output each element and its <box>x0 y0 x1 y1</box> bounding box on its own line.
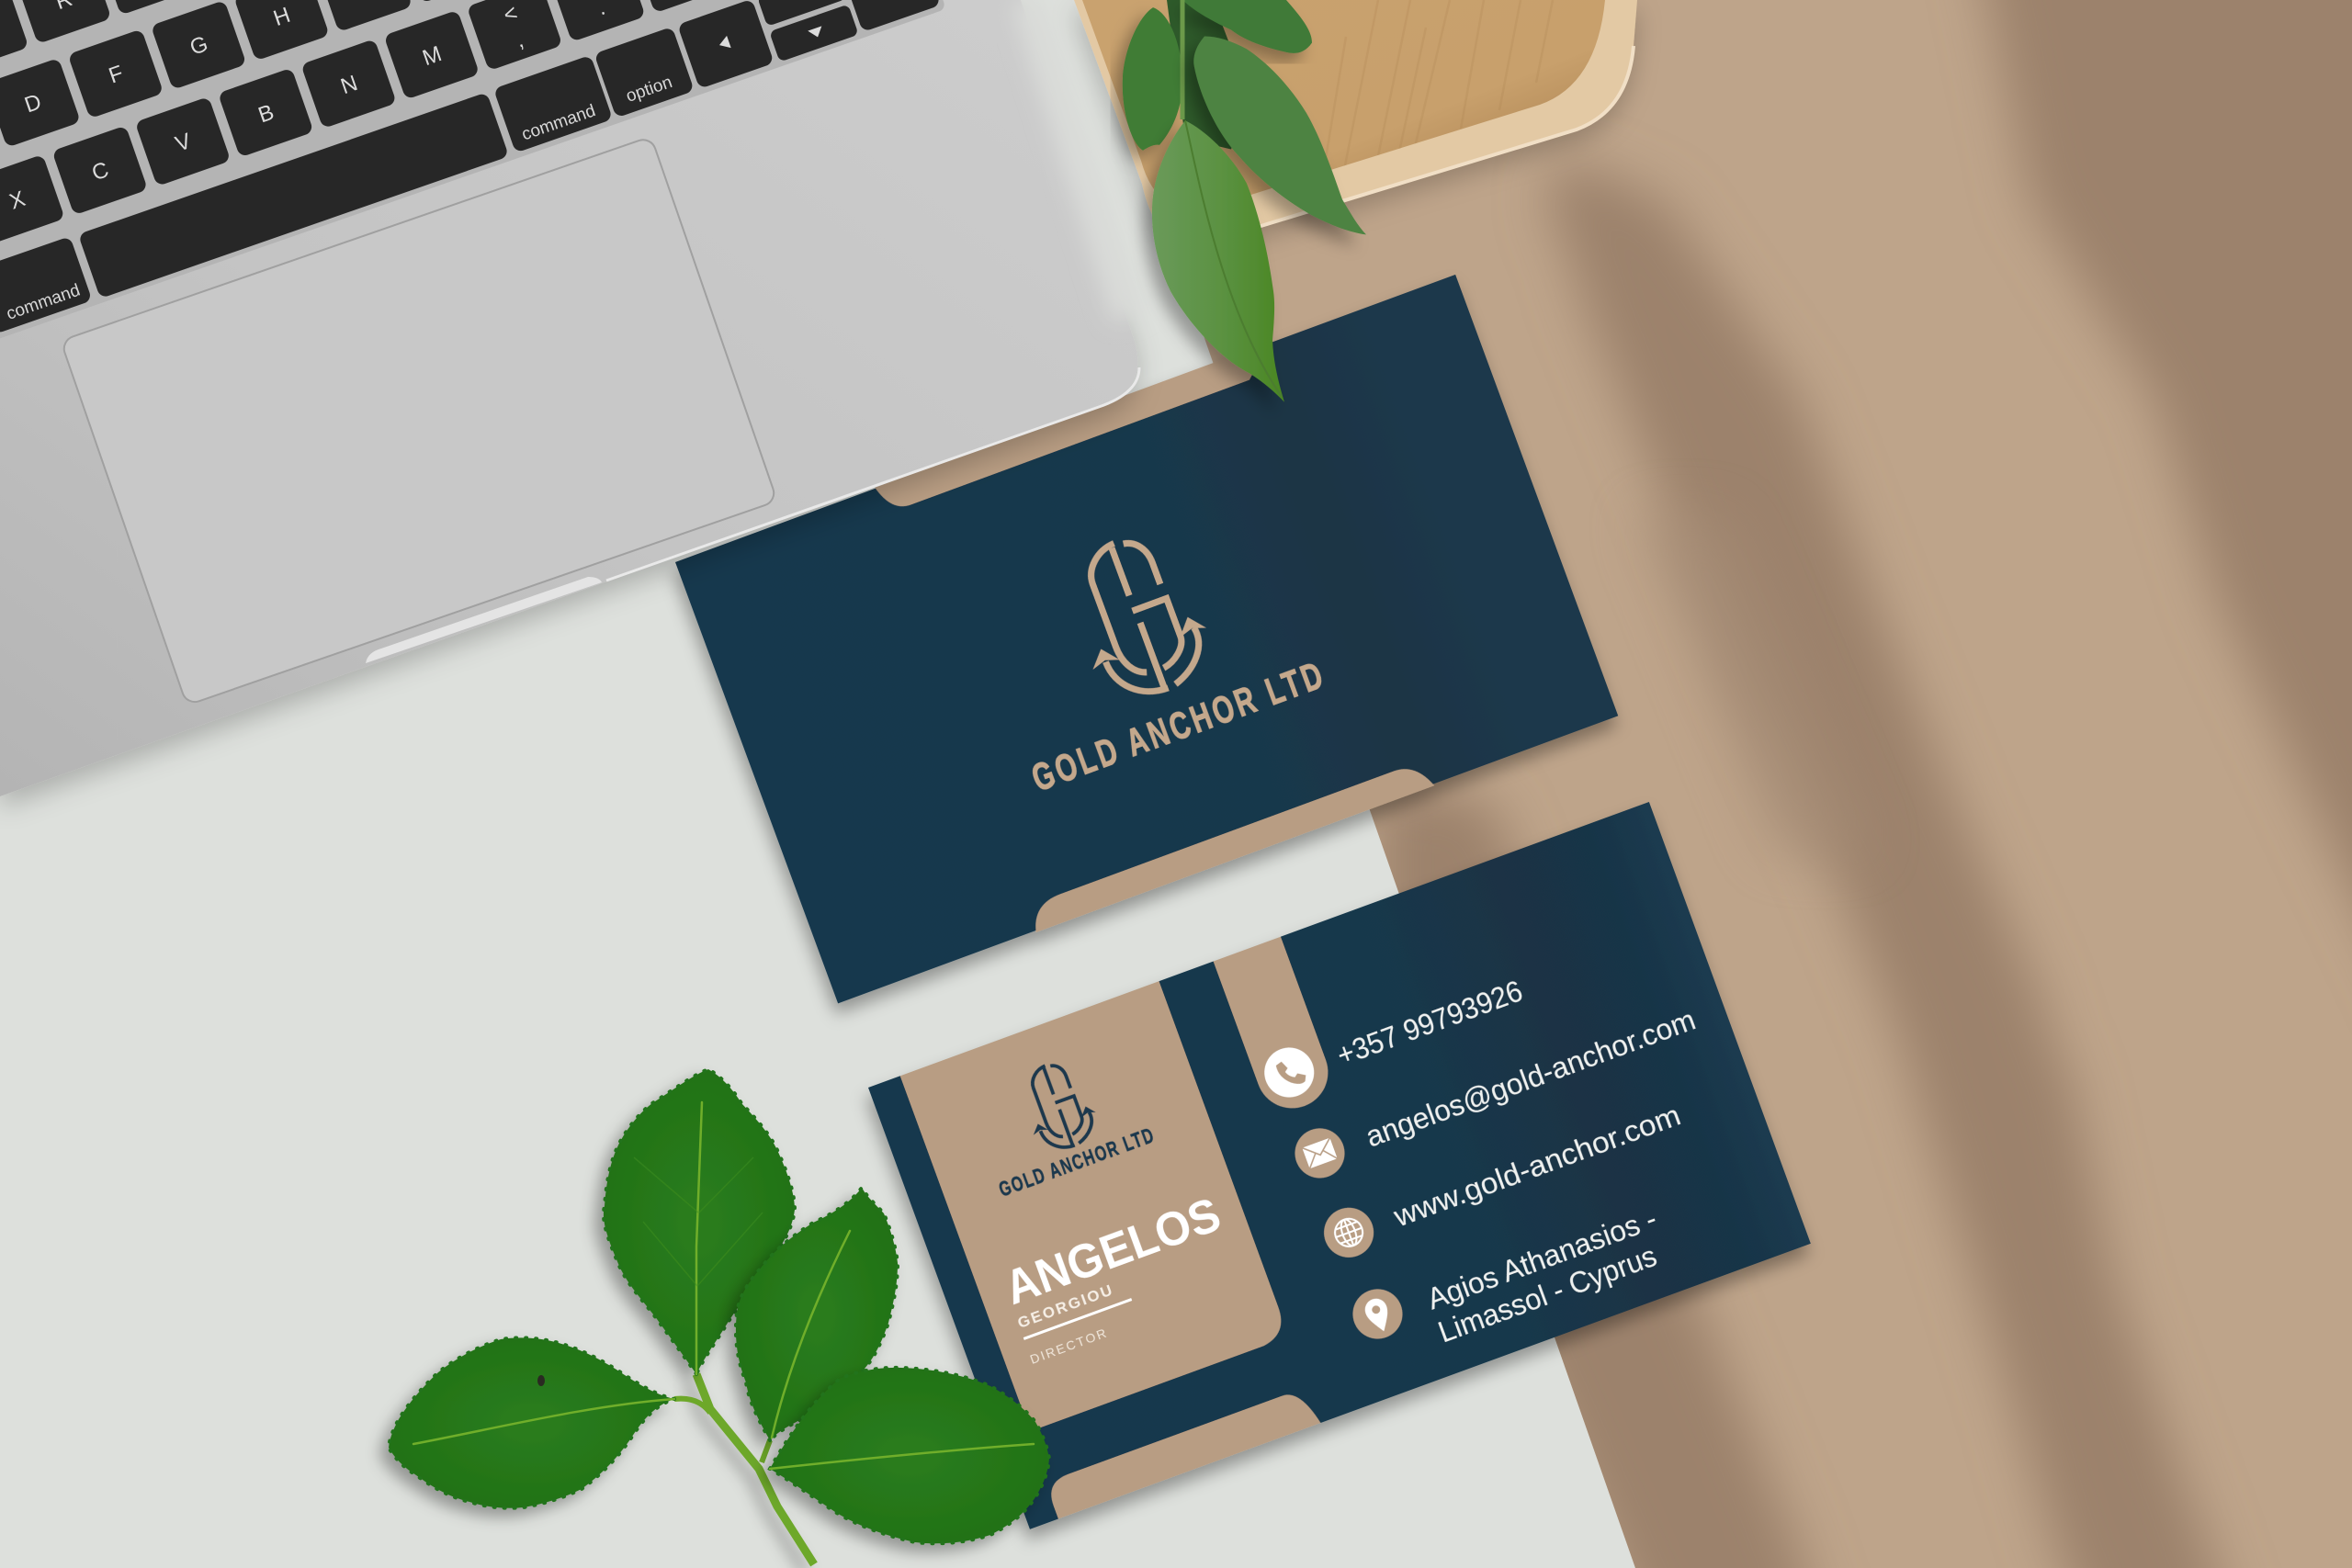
wood grain <box>1323 0 1553 175</box>
key row: space bar row: command <box>4 281 83 324</box>
icon: envelope <box>1288 1122 1351 1185</box>
icon: map pin <box>1346 1282 1409 1346</box>
key row: home letters: G <box>187 31 211 61</box>
laptop opening lip <box>366 577 602 663</box>
tan paper sheet with window shadows <box>1086 0 2352 1568</box>
leaf: top <box>604 1069 795 1374</box>
laptop front edge highlight <box>606 367 1139 581</box>
website address: www.gold-anchor.com <box>1388 1099 1685 1234</box>
laptop right edge glow <box>1027 0 1128 317</box>
leaf: lower large <box>1152 120 1284 402</box>
laptop <box>0 0 1139 796</box>
branch to left leaf <box>674 1399 710 1413</box>
icon: phone <box>1258 1041 1321 1104</box>
key row: home letters: F <box>106 61 127 89</box>
small logo <box>1012 1055 1104 1159</box>
key row: space bar row <box>0 0 941 335</box>
sprig stem <box>696 1374 814 1564</box>
icon: globe <box>1317 1201 1381 1264</box>
branch to small leaf <box>762 1440 770 1462</box>
lower leaf midrib <box>1185 120 1282 397</box>
tray floor <box>1082 0 1605 209</box>
surname: Georgiou: GEORGIOU <box>1015 1281 1114 1332</box>
bottom tan tab <box>1026 760 1434 932</box>
stem <box>1180 0 1185 119</box>
key row: bottom letters: V <box>172 129 194 157</box>
top tan tab <box>875 342 1280 514</box>
tray front edge highlight <box>1213 46 1634 241</box>
keyboard <box>0 0 946 381</box>
name divider <box>1023 1300 1132 1338</box>
key row: home letters: H <box>270 3 293 31</box>
card 1: logo side <box>675 274 1619 1005</box>
tan name panel <box>900 981 1289 1431</box>
postal address: Limassol - Cyprus <box>1434 1239 1661 1349</box>
key row: top letters <box>0 0 195 73</box>
name: Angelos: ANGELOS <box>998 1188 1227 1315</box>
bottom tan tab <box>1046 1387 1320 1518</box>
key row: home letters: D <box>21 89 45 118</box>
key row: space bar row: option <box>624 73 675 107</box>
key row: bottom letters: B <box>255 100 277 128</box>
company name: GOLD ANCHOR LTD <box>1026 653 1329 800</box>
postal address: Agios Athanasios - <box>1423 1201 1661 1315</box>
dark background foliage <box>1167 0 1250 150</box>
trackpad <box>61 136 777 705</box>
job title: DIRECTOR <box>1028 1325 1108 1367</box>
key row: bottom letters: , <box>513 28 526 53</box>
leaf: large right <box>770 1368 1049 1543</box>
small company name: GOLD ANCHOR LTD <box>996 1124 1157 1202</box>
email address: angelos@gold-anchor.com <box>1362 1003 1700 1154</box>
leaf: left <box>389 1337 674 1508</box>
key row: bottom letters: < <box>501 0 521 28</box>
key row: bottom letters: C <box>89 157 112 186</box>
leaf: small left <box>1123 7 1182 151</box>
leaf: small right <box>736 1188 898 1440</box>
leaf: long middle <box>1193 36 1366 234</box>
phone number: +357 99793926 <box>1332 974 1527 1072</box>
plant sprig at bottom <box>389 1069 1049 1564</box>
key row: bottom letters <box>0 0 729 244</box>
card 2: contact side <box>868 802 1811 1529</box>
phone tab <box>1214 937 1338 1118</box>
key row: bottom letters: X <box>6 186 28 215</box>
key row: bottom letters: M <box>419 41 445 71</box>
wooden tray <box>1074 0 1637 243</box>
gold anchor logo <box>1055 524 1222 713</box>
leaf: upper <box>1182 0 1312 53</box>
key row: space bar row: command <box>519 101 598 144</box>
key row: home letters <box>0 0 579 148</box>
plant sprig at top <box>1123 0 1366 402</box>
key row: bottom letters: N <box>337 71 361 99</box>
